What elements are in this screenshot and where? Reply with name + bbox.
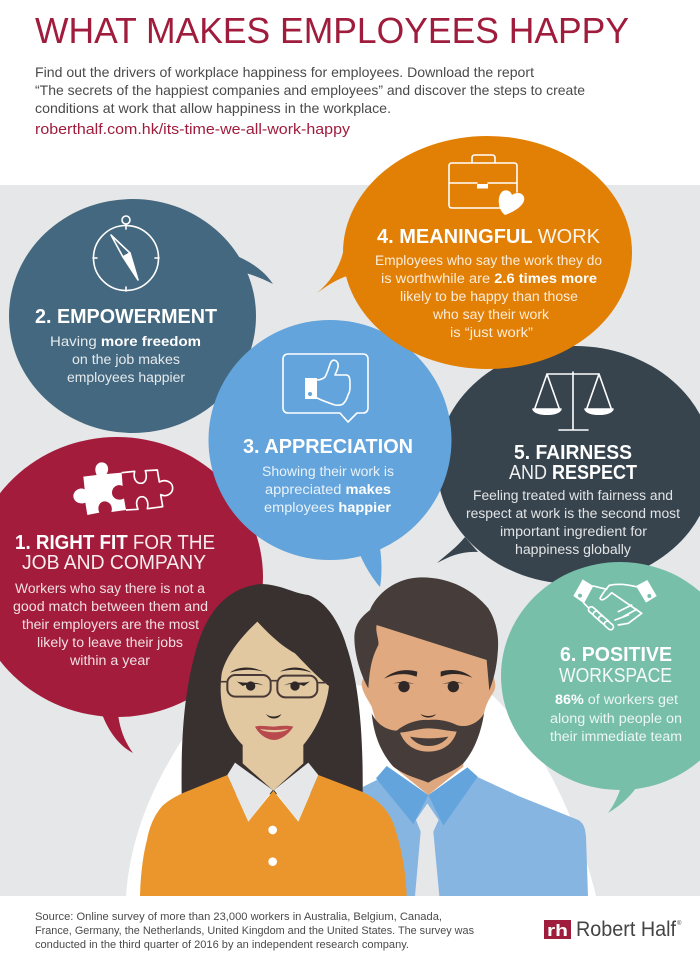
shirt xyxy=(360,777,588,896)
source note xyxy=(35,911,474,951)
body text: who say their work xyxy=(432,307,549,322)
intro text: conditions at work that allow happiness in the workplace. xyxy=(35,100,391,116)
face and neck xyxy=(221,622,329,791)
mouth xyxy=(400,728,457,752)
hair xyxy=(354,577,498,691)
body text: Feeling treated with fairness and xyxy=(473,488,673,503)
face xyxy=(362,623,495,783)
speech bubble xyxy=(9,199,273,433)
heading xyxy=(15,532,215,574)
source note: Source: Online survey of more than 23,000 workers in Australia, Belgium, Canada, xyxy=(35,911,442,923)
heading: 3. APPRECIATION xyxy=(243,436,413,458)
heading: WORKSPACE xyxy=(559,665,672,687)
body text xyxy=(13,581,208,668)
heading: JOB AND COMPANY xyxy=(22,552,206,574)
body text xyxy=(375,253,602,340)
buttons xyxy=(268,826,277,834)
speech bubble xyxy=(317,136,632,369)
intro text xyxy=(35,64,585,116)
intro text: Find out the drivers of workplace happiness for employees. Download the report xyxy=(35,64,534,80)
panel: 3 appreciation xyxy=(208,320,452,587)
body text: 86% of workers get xyxy=(555,692,678,707)
body text: employees happier xyxy=(264,500,392,515)
body text: is worthwhile are 2.6 times more xyxy=(381,271,598,286)
speech bubble xyxy=(437,346,700,584)
source note: conducted in the third quarter of 2016 by an independent research company. xyxy=(35,939,409,951)
body text: good match between them and xyxy=(13,599,208,614)
body text xyxy=(466,488,680,557)
illustration: man xyxy=(354,577,588,896)
title: WHAT MAKES EMPLOYEES HAPPY xyxy=(35,10,629,51)
heading: 2. EMPOWERMENT xyxy=(35,306,217,328)
logo: Robert Half: Robert Half xyxy=(576,918,676,941)
body text: within a year xyxy=(69,653,151,668)
report link: roberthalf.com.hk/its-time-we-all-work-happy xyxy=(35,122,351,138)
icon: puzzle xyxy=(73,462,173,515)
icon: handshake xyxy=(573,579,657,631)
heading: 5. FAIRNESS xyxy=(514,442,632,464)
hair xyxy=(182,584,363,795)
tie xyxy=(415,803,439,896)
lips xyxy=(255,726,293,740)
beard xyxy=(372,713,484,783)
icon: scales xyxy=(533,372,613,430)
logo: Robert Half: rh xyxy=(547,921,568,940)
body text xyxy=(550,692,682,744)
source note: France, Germany, the Netherlands, United Kingdom and the United States. The survey was xyxy=(35,925,474,937)
speech bubble xyxy=(0,437,263,753)
body text: employees happier xyxy=(67,370,186,385)
icon: thumbs up xyxy=(283,354,368,422)
body text: their employers are the most xyxy=(22,617,199,632)
eyes and brows xyxy=(230,668,312,718)
body text: respect at work is the second most xyxy=(466,506,680,521)
body text: Showing their work is xyxy=(262,464,394,479)
collar xyxy=(227,763,318,822)
body text: important ingredient for xyxy=(500,524,648,539)
body text: on the job makes xyxy=(72,352,180,367)
body text: appreciated makes xyxy=(265,482,391,497)
body text: Workers who say there is not a xyxy=(15,581,206,596)
panel: 6 positive workspace xyxy=(501,562,700,813)
panel: 4 meaningful work xyxy=(317,136,632,369)
neck xyxy=(393,757,463,795)
panel: 2 empowerment xyxy=(9,199,273,433)
heading xyxy=(559,644,672,687)
heading: 6. POSITIVE xyxy=(560,644,672,666)
panel: 1 right fit xyxy=(0,437,263,753)
eyes and brows xyxy=(384,670,473,717)
illustration: woman xyxy=(140,584,407,896)
intro text: “The secrets of the happiest companies and employees” and discover the steps to create xyxy=(35,82,585,98)
panel: 5 fairness and respect xyxy=(437,346,700,584)
body text: their immediate team xyxy=(550,729,682,744)
heading xyxy=(509,442,637,484)
collar xyxy=(376,766,478,826)
body text: likely to be happy than those xyxy=(400,289,578,304)
body text xyxy=(50,334,201,385)
heading: AND RESPECT xyxy=(509,462,637,484)
sweater xyxy=(140,775,407,896)
body text: likely to leave their jobs xyxy=(37,635,183,650)
speech bubble xyxy=(208,320,452,587)
body text xyxy=(262,464,394,515)
body text: is “just work” xyxy=(450,325,533,340)
body text: Having more freedom xyxy=(50,334,201,349)
speech bubble xyxy=(501,562,700,813)
icon: compass xyxy=(93,216,159,291)
glasses xyxy=(221,681,327,683)
heading: 1. RIGHT FIT FOR THE xyxy=(15,532,215,554)
icon: briefcase with heart xyxy=(449,155,524,215)
heading: 4. MEANINGFUL WORK xyxy=(377,226,601,248)
body text: happiness globally xyxy=(515,542,631,557)
logo: Robert Half: ® xyxy=(677,920,682,927)
body text: Employees who say the work they do xyxy=(375,253,602,268)
body text: along with people on xyxy=(550,711,682,726)
